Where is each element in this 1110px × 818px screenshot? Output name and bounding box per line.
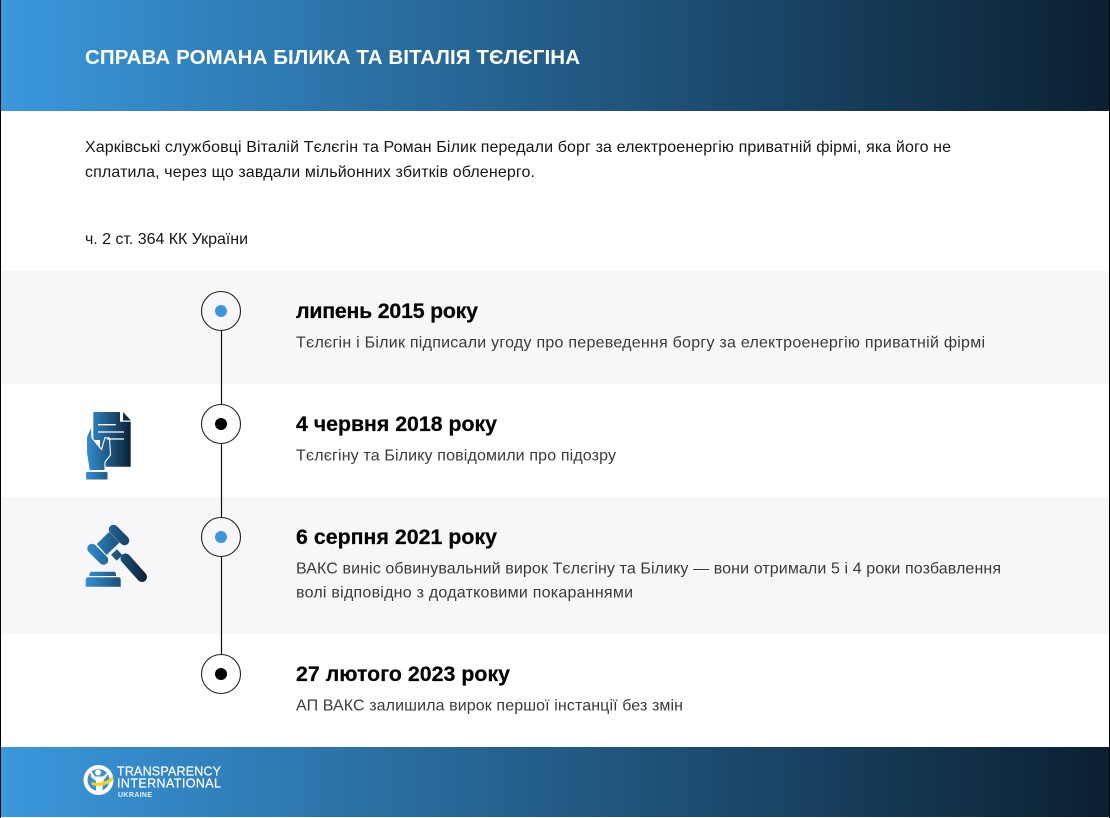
- event: February 2023: [296, 662, 683, 714]
- marker: August 2021: [202, 518, 240, 556]
- event: February 2023: АП ВАКС залишила вирок першої інстанції без змін: [296, 697, 683, 714]
- logo: Transparency International Ukraine: TRANSPARENCY: [117, 764, 222, 778]
- logo: Transparency International Ukraine: UKRAINE: [118, 792, 152, 799]
- header band: [0, 0, 1110, 111]
- event: August 2021: [296, 525, 1001, 601]
- icon: hand holding document: [86, 412, 131, 480]
- event: August 2021: 6 серпня 2021 року: [296, 525, 497, 549]
- icon: gavel: [86, 530, 142, 587]
- logo: Transparency International Ukraine: [84, 764, 222, 799]
- event: July 2015: [296, 299, 985, 351]
- row background: July 2015: [0, 271, 1110, 384]
- event: June 2018: 4 червня 2018 року: [296, 412, 497, 436]
- intro text: [85, 139, 951, 181]
- event: June 2018: Тєлєгіну та Білику повідомили про підозру: [296, 447, 616, 464]
- event: July 2015: Тєлєгін і Білик підписали угоду про переведення боргу за електроенергію приватній фірмі: [296, 334, 985, 351]
- footer band: [0, 747, 1110, 817]
- marker: June 2018: [202, 404, 240, 444]
- logo: Transparency International Ukraine: INTERNATIONAL: [117, 776, 221, 790]
- event: August 2021: волі відповідно з додатковими покараннями: [296, 584, 633, 601]
- title: СПРАВА РОМАНА БІЛИКА ТА ВІТАЛІЯ ТЄЛЄГІНА: [85, 46, 580, 69]
- timeline: [202, 292, 240, 694]
- marker: February 2023: [202, 654, 240, 694]
- legal article reference: ч. 2 ст. 364 КК України: [85, 231, 248, 248]
- event: June 2018: [296, 412, 616, 464]
- intro text: сплатила, через що завдали мільйонних збитків обленерго.: [85, 164, 535, 181]
- event: August 2021: ВАКС виніс обвинувальний вирок Тєлєгіну та Білику — вони отримали 5 і 4 роки позбавлення: [296, 560, 1001, 577]
- row background: August 2021: [0, 497, 1110, 634]
- event: July 2015: липень 2015 року: [296, 299, 478, 323]
- marker: July 2015: [202, 292, 240, 330]
- logo emblem: [84, 765, 114, 795]
- event: February 2023: 27 лютого 2023 року: [296, 662, 510, 686]
- intro text: Харківські службовці Віталій Тєлєгін та Роман Білик передали борг за електроенергію приватній фірмі, яка його не: [85, 139, 951, 156]
